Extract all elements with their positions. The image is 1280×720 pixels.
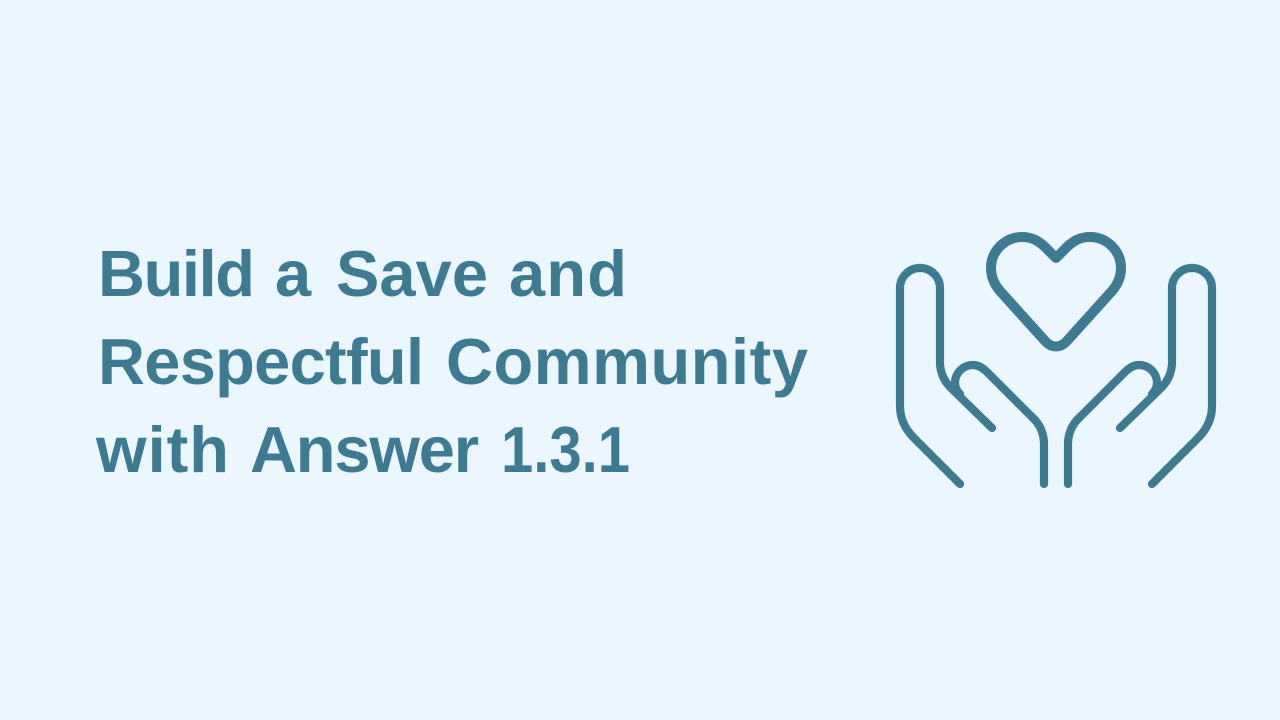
title line 2: Community <box>446 325 808 398</box>
title line 2: Respectful <box>98 325 424 398</box>
icon: hands holding heart <box>900 237 1212 484</box>
title line 3: Answer <box>250 413 479 486</box>
title line 3: 1.3.1 <box>501 413 630 486</box>
title <box>95 237 808 486</box>
title line 1: Build <box>98 237 255 310</box>
title line 1: Save <box>336 237 488 310</box>
icon: left hand <box>900 268 1044 484</box>
title line 1: a <box>275 237 312 310</box>
icon: right hand <box>1068 268 1212 484</box>
title line 1: and <box>509 237 627 310</box>
title line 3: with <box>95 413 229 486</box>
icon: heart <box>991 237 1121 346</box>
